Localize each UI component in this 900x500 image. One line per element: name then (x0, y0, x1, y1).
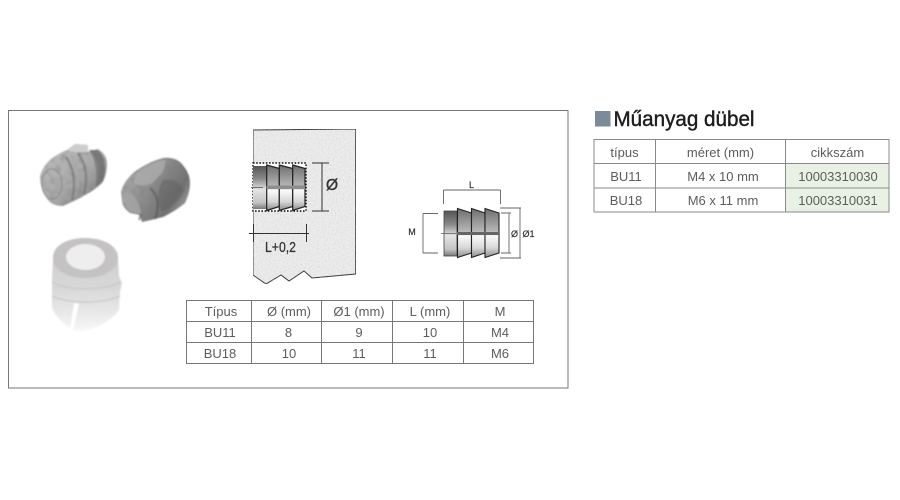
dimension lines (423, 190, 521, 258)
wood block (253, 129, 356, 284)
table: dimensions: 11 (352, 346, 366, 361)
label: diameter: Ø (326, 177, 338, 194)
table: dimensions: M (495, 304, 505, 319)
table: dimensions: 8 (285, 325, 292, 340)
table: dimensions: 10 (282, 346, 296, 361)
dimension labels: L (469, 180, 474, 190)
panel: product drawings (8, 110, 568, 388)
table: order codes: 10003310031 (798, 193, 878, 208)
diagram: dowel dimensions: Ø (511, 229, 518, 239)
dimension: diameter (312, 163, 329, 211)
table: order codes: típus (610, 145, 639, 160)
table: order codes (594, 140, 889, 212)
label: length: L+0,2 (265, 240, 296, 256)
table: dimensions: BU11 (204, 325, 236, 340)
heading: Műanyag dübel: Műanyag dübel (614, 108, 754, 131)
table: dimensions: 10 (423, 325, 437, 340)
table: dimensions: Ø1 (mm) (333, 304, 385, 319)
table: dimensions: 11 (423, 346, 437, 361)
table: order codes: 10003310030 (798, 169, 878, 184)
table: order codes: méret (mm) (687, 145, 754, 160)
dowel teeth (458, 208, 499, 258)
dotted bore (253, 163, 306, 211)
diagram: dowel dimensions: M (408, 227, 416, 237)
table: dimensions: M6 (491, 346, 509, 361)
photo: dowel side view right (121, 158, 190, 222)
table: dimensions: BU18 (204, 346, 236, 361)
diagram: dowel dimensions (408, 180, 535, 258)
table: dimensions: Típus (205, 304, 238, 319)
table: dimensions: L (mm) (410, 304, 450, 319)
table: dimensions: Ø (mm) (267, 304, 311, 319)
table: order codes: BU11 (610, 169, 642, 184)
table: dimensions: M4 (491, 325, 509, 340)
diagram: dowel installed in panel (249, 129, 356, 284)
diagram: dowel dimensions: Ø1 (522, 229, 535, 239)
table: order codes: M6 x 11 mm (688, 193, 758, 208)
photo: translucent dowel (52, 238, 122, 331)
table: order codes: cikkszám (811, 145, 864, 160)
table: order codes: BU18 (610, 193, 642, 208)
table: order codes: M4 x 10 mm (687, 169, 759, 184)
dowel head (253, 166, 266, 209)
table: dimensions (186, 300, 534, 364)
dowel teeth (267, 165, 305, 210)
dimension: length (249, 224, 309, 242)
table: dimensions: 9 (355, 325, 363, 340)
photo: dowel side view left (40, 144, 107, 206)
